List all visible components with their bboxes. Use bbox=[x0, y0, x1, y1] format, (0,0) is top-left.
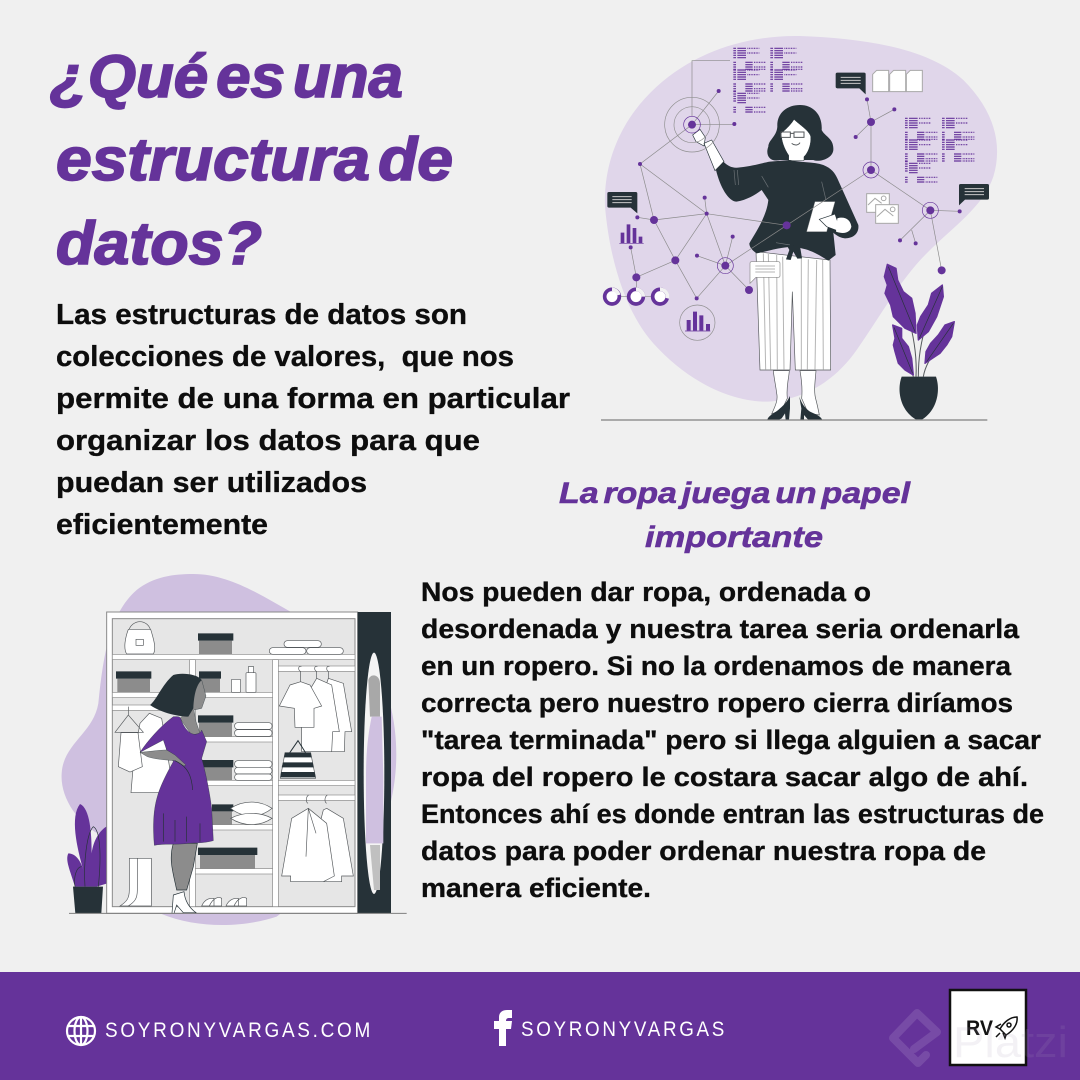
woman: pants bbox=[756, 252, 831, 370]
title bbox=[50, 43, 453, 277]
watermark text: Platzi bbox=[953, 1018, 1068, 1067]
icon: rocket bbox=[996, 1017, 1017, 1038]
watermark bbox=[893, 1013, 1068, 1067]
subheading: importante bbox=[645, 521, 823, 554]
title: estructura de bbox=[56, 126, 453, 193]
text block: definition: colecciones de valores, que nos bbox=[56, 341, 514, 373]
woman: white legs bbox=[772, 371, 819, 415]
floor line bbox=[69, 912, 407, 915]
logo text: RV bbox=[966, 1017, 993, 1040]
woman: high heels bbox=[172, 892, 196, 913]
woman: glasses and mouth bbox=[781, 132, 804, 145]
woman: hair bbox=[150, 674, 202, 717]
woman: arm on hip bbox=[140, 750, 186, 766]
ground line bbox=[601, 418, 987, 422]
text block: definition bbox=[56, 299, 570, 541]
sweater creases bbox=[734, 170, 826, 245]
boots and shoes bbox=[120, 858, 247, 906]
bar chart icon bbox=[619, 224, 644, 243]
network rings bbox=[665, 97, 719, 152]
title: datos? bbox=[56, 210, 262, 277]
illustration: woman with data network bbox=[601, 36, 997, 420]
text block: definition: organizar los datos para que bbox=[56, 425, 480, 457]
text block: definition: Las estructuras de datos son bbox=[56, 299, 467, 331]
text block: explanation: manera eficiente. bbox=[421, 873, 651, 903]
text block: explanation: en un ropero. Si no la ordenamos de manera bbox=[421, 651, 1011, 681]
image icons bbox=[867, 194, 898, 223]
pants stripes bbox=[763, 253, 823, 369]
text block: explanation: datos para poder ordenar nuestra ropa de bbox=[421, 836, 986, 866]
watermark diamond bbox=[893, 1013, 937, 1063]
woman: legs bbox=[171, 843, 197, 890]
text block: explanation: Nos pueden dar ropa, ordenada o bbox=[421, 577, 871, 607]
potted plant bbox=[884, 264, 954, 419]
hanging shirts bbox=[279, 666, 352, 752]
sweater tie bbox=[786, 245, 802, 260]
illustration: woman at wardrobe bbox=[62, 574, 407, 925]
text block: explanation: correcta pero nuestro ropero cierra diríamos bbox=[421, 688, 1013, 718]
donut charts bbox=[605, 289, 668, 304]
woman: heels bbox=[767, 396, 822, 420]
handbag bbox=[125, 622, 155, 654]
footer band bbox=[0, 972, 1080, 1080]
icon: facebook bbox=[494, 1010, 512, 1046]
text block: definition: eficientemente bbox=[56, 509, 268, 541]
woman: purple dress bbox=[140, 717, 213, 845]
folded towels, bottles, pillows bbox=[231, 641, 343, 825]
striped bag bbox=[280, 741, 316, 778]
document icons bbox=[873, 70, 922, 92]
woman: back hair bbox=[767, 105, 833, 161]
wardrobe interior bbox=[112, 619, 355, 907]
text block: explanation bbox=[421, 577, 1044, 903]
facebook text: SOYRONYVARGAS bbox=[521, 1018, 727, 1041]
text block: explanation: Entonces ahí es donde entran las estructuras de bbox=[421, 799, 1044, 829]
icon: globe bbox=[67, 1017, 95, 1045]
blazers bbox=[282, 795, 353, 882]
shelves and dividers bbox=[112, 654, 355, 907]
dress folds bbox=[163, 761, 200, 842]
code blocks bbox=[733, 48, 975, 182]
tablet and hand bbox=[807, 202, 851, 233]
mirror bbox=[364, 653, 384, 894]
subheading: La ropa juega un papel bbox=[559, 477, 911, 510]
text block: explanation: desordenada y nuestra tarea seria ordenarla bbox=[421, 614, 1019, 644]
title: ¿Qué es una bbox=[50, 43, 403, 110]
storage boxes bbox=[116, 633, 257, 869]
text block: explanation: "tarea terminada" pero si llega alguien a sacar bbox=[421, 725, 1041, 755]
dark chat bubbles bbox=[607, 73, 989, 213]
left hanging clothes bbox=[115, 707, 170, 793]
woman: face and neck bbox=[781, 119, 811, 161]
wardrobe frame bbox=[107, 612, 358, 913]
text block: definition: permite de una forma en particular bbox=[56, 383, 570, 415]
network lines bbox=[612, 61, 960, 298]
background blob bbox=[62, 574, 396, 925]
circled bar chart icon bbox=[680, 305, 715, 340]
text block: definition: puedan ser utilizados bbox=[56, 467, 367, 499]
text block: explanation: ropa del ropero le costara sacar algo de ahí. bbox=[421, 762, 1028, 792]
woman: sweater bbox=[716, 160, 858, 261]
website text: SOYRONYVARGAS.COM bbox=[105, 1019, 373, 1042]
woman: raised arm and hand bbox=[693, 129, 724, 171]
small plant bbox=[67, 804, 107, 913]
logo box bbox=[950, 990, 1026, 1065]
network nodes bbox=[629, 89, 962, 300]
white chat bubble bbox=[750, 262, 780, 283]
woman: face and neck bbox=[180, 680, 206, 735]
subheading bbox=[559, 477, 911, 554]
background blob bbox=[605, 36, 997, 402]
dark side panel bbox=[358, 612, 391, 913]
